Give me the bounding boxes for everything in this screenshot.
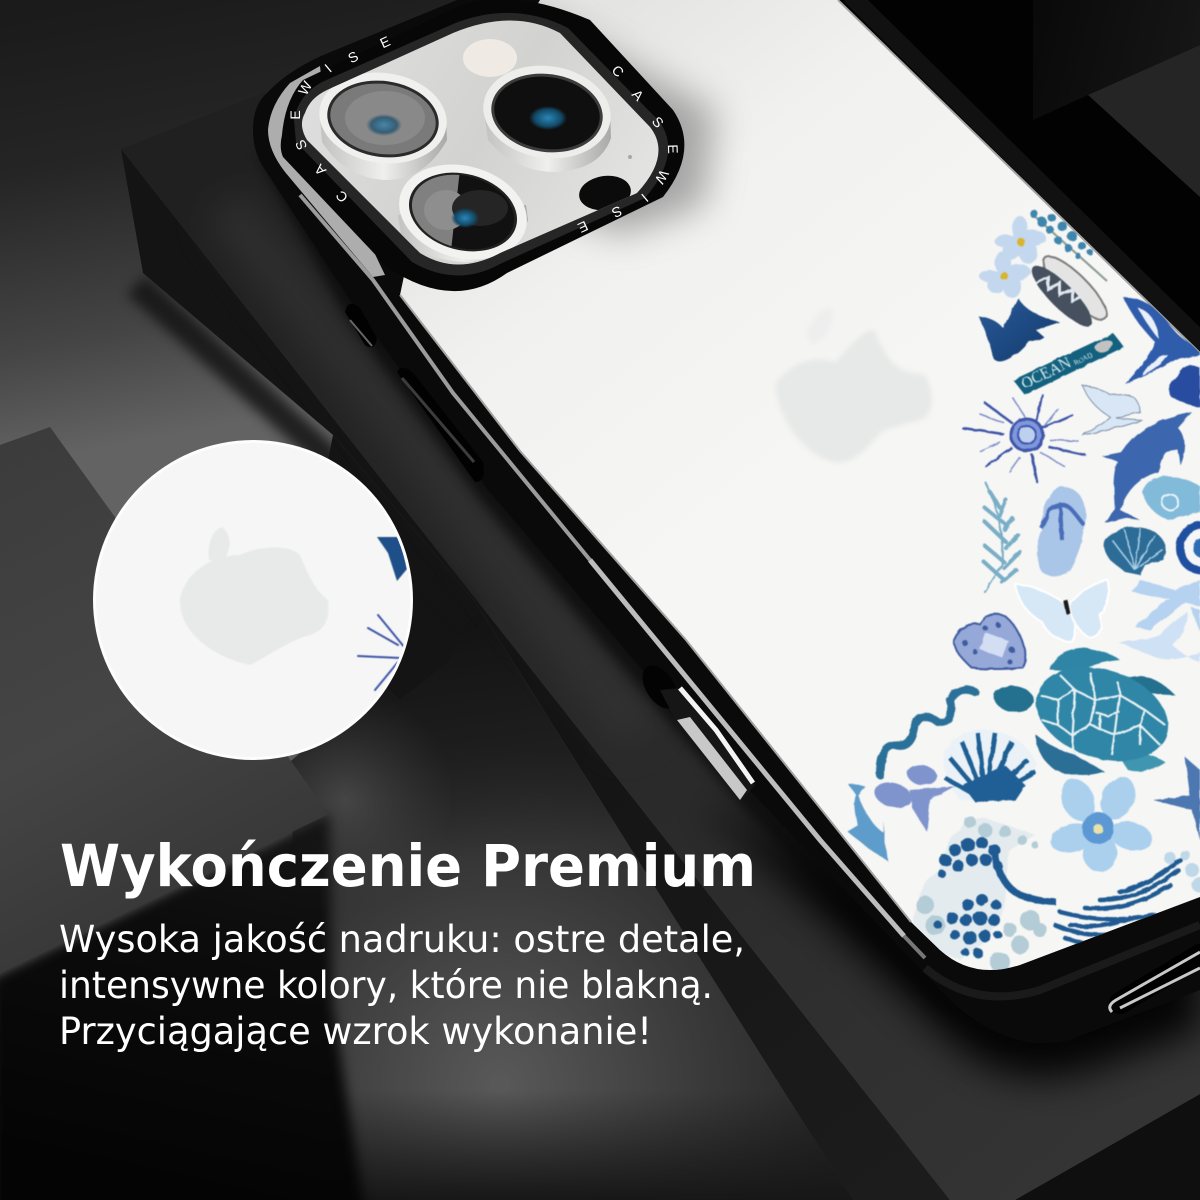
large scallop xyxy=(943,729,1037,802)
CASEWISE lettering: W xyxy=(295,78,316,98)
starfish xyxy=(1153,757,1200,840)
microphone and lidar xyxy=(579,155,632,210)
ocean road sign: OCEAN xyxy=(1018,354,1074,393)
mute switch xyxy=(345,304,377,347)
mermaid tail xyxy=(1118,612,1200,662)
CASEWISE lettering: I xyxy=(321,61,335,75)
CASEWISE lettering: S xyxy=(345,48,361,66)
heading: Wykończenie Premium xyxy=(60,832,756,900)
CASEWISE lettering: W xyxy=(651,167,672,187)
whale tail xyxy=(1123,297,1200,384)
zoom circle artwork fragments xyxy=(358,537,407,695)
small butterfly xyxy=(1082,385,1142,435)
CASEWISE lettering: C xyxy=(332,188,351,206)
lens top left xyxy=(320,72,447,180)
CASEWISE lettering: E xyxy=(575,218,591,236)
flip flop xyxy=(1037,486,1086,577)
lenses xyxy=(313,39,633,273)
CASEWISE lettering xyxy=(287,33,681,236)
right edge strip xyxy=(850,0,1200,345)
body text: intensywne kolory, które nie blakną. xyxy=(59,963,713,1007)
turtle xyxy=(992,648,1180,777)
body text: Wysoka jakość nadruku: ostre detale, xyxy=(59,917,745,961)
CASEWISE lettering: S xyxy=(292,137,310,153)
CASEWISE lettering: A xyxy=(310,161,329,179)
body text: Przyciągające wzrok wykonanie! xyxy=(59,1009,652,1053)
sea wave squiggle xyxy=(880,690,975,775)
dolphin xyxy=(1102,412,1192,523)
phone case: black bumper xyxy=(253,0,1200,1043)
spiral shell xyxy=(1142,476,1200,520)
CASEWISE lettering: A xyxy=(629,86,648,104)
apple logo on phone xyxy=(775,308,932,463)
body text xyxy=(59,917,745,1053)
camera glass xyxy=(302,20,658,264)
patterned heart xyxy=(954,614,1026,669)
flash xyxy=(463,39,517,77)
fish xyxy=(978,298,1060,362)
CASEWISE lettering: C xyxy=(609,62,627,80)
panel edge line xyxy=(400,0,1200,922)
blue heart xyxy=(1169,365,1200,407)
CASEWISE lettering: E xyxy=(377,33,393,51)
CASEWISE lettering: E xyxy=(665,144,681,154)
case ring xyxy=(281,0,684,291)
lens bottom xyxy=(398,164,528,262)
volume button xyxy=(397,368,484,482)
CASEWISE lettering: S xyxy=(649,113,667,131)
silver bumper line xyxy=(300,195,590,560)
large butterfly xyxy=(1015,580,1109,642)
lens top right xyxy=(483,66,611,172)
small dolphin xyxy=(848,784,889,862)
CASEWISE lettering: E xyxy=(287,110,303,120)
blue bow xyxy=(872,763,955,832)
coral branch xyxy=(1030,210,1107,281)
ring soft shadow on panel xyxy=(538,0,734,252)
blue flower xyxy=(1050,776,1152,872)
side buttons xyxy=(345,304,1200,1012)
lit band on block top xyxy=(225,205,640,735)
flower lower xyxy=(979,251,1031,298)
ocean road sign: ROAD xyxy=(1072,351,1094,367)
fern leaf xyxy=(984,482,1020,592)
sun xyxy=(963,395,1085,482)
zoom circle apple logo xyxy=(180,527,328,665)
scallop shell xyxy=(1104,527,1166,575)
ocean sticker artwork xyxy=(848,210,1200,972)
charging port xyxy=(1110,952,1200,1012)
power button xyxy=(635,659,755,800)
CASEWISE lettering: S xyxy=(609,203,625,221)
surfboards xyxy=(1031,254,1108,328)
ocean road sign xyxy=(1013,333,1124,395)
flower top xyxy=(994,216,1046,264)
phone back: clear white panel xyxy=(400,0,1200,970)
glass rim xyxy=(268,66,385,277)
evil eye xyxy=(1176,521,1200,575)
great wave xyxy=(912,816,1200,972)
phone shadow xyxy=(700,800,1200,1078)
camera island xyxy=(268,0,684,291)
CASEWISE lettering: I xyxy=(638,191,652,205)
light bow xyxy=(1132,580,1200,632)
zoom circle callout xyxy=(93,440,413,760)
